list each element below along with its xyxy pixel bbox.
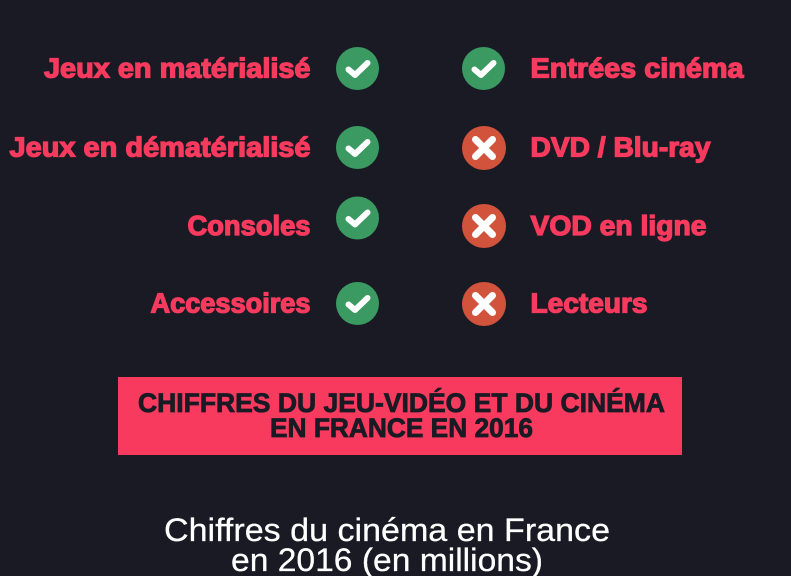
label: Entrées cinéma: Entrées cinéma [530,52,744,84]
label: VOD en ligne: VOD en ligne [530,210,706,241]
icon: cross, DVD / Blu-ray [462,126,506,170]
banner: chiffres du jeu-vidéo et du cinéma: CHIFFRES DU JEU-VIDÉO ET DU CINÉMA [138,388,665,418]
icon: check, Entrées cinéma [462,47,505,90]
label: Jeux en matérialisé: Jeux en matérialisé [44,52,310,84]
icon: check, Accessoires [336,282,379,325]
label: DVD / Blu-ray: DVD / Blu-ray [530,132,711,162]
icon: cross, VOD en ligne [462,204,506,248]
banner: chiffres du jeu-vidéo et du cinéma [118,377,682,455]
icon: check, Jeux en dématérialisé [336,126,379,169]
label: Jeux en dématérialisé: Jeux en dématérialisé [10,132,310,162]
label: Consoles: Consoles [188,210,310,241]
subtitle: chiffres du cinéma [164,512,610,576]
icon: check, Jeux en matérialisé [336,47,379,90]
banner: chiffres du jeu-vidéo et du cinéma: EN FRANCE EN 2016 [270,413,533,443]
label: Lecteurs: Lecteurs [530,288,648,318]
subtitle: chiffres du cinéma: Chiffres du cinéma en France [164,512,610,548]
icon: check, Consoles [336,196,379,240]
label: Accessoires: Accessoires [150,288,310,318]
icon: cross, Lecteurs [462,282,506,326]
